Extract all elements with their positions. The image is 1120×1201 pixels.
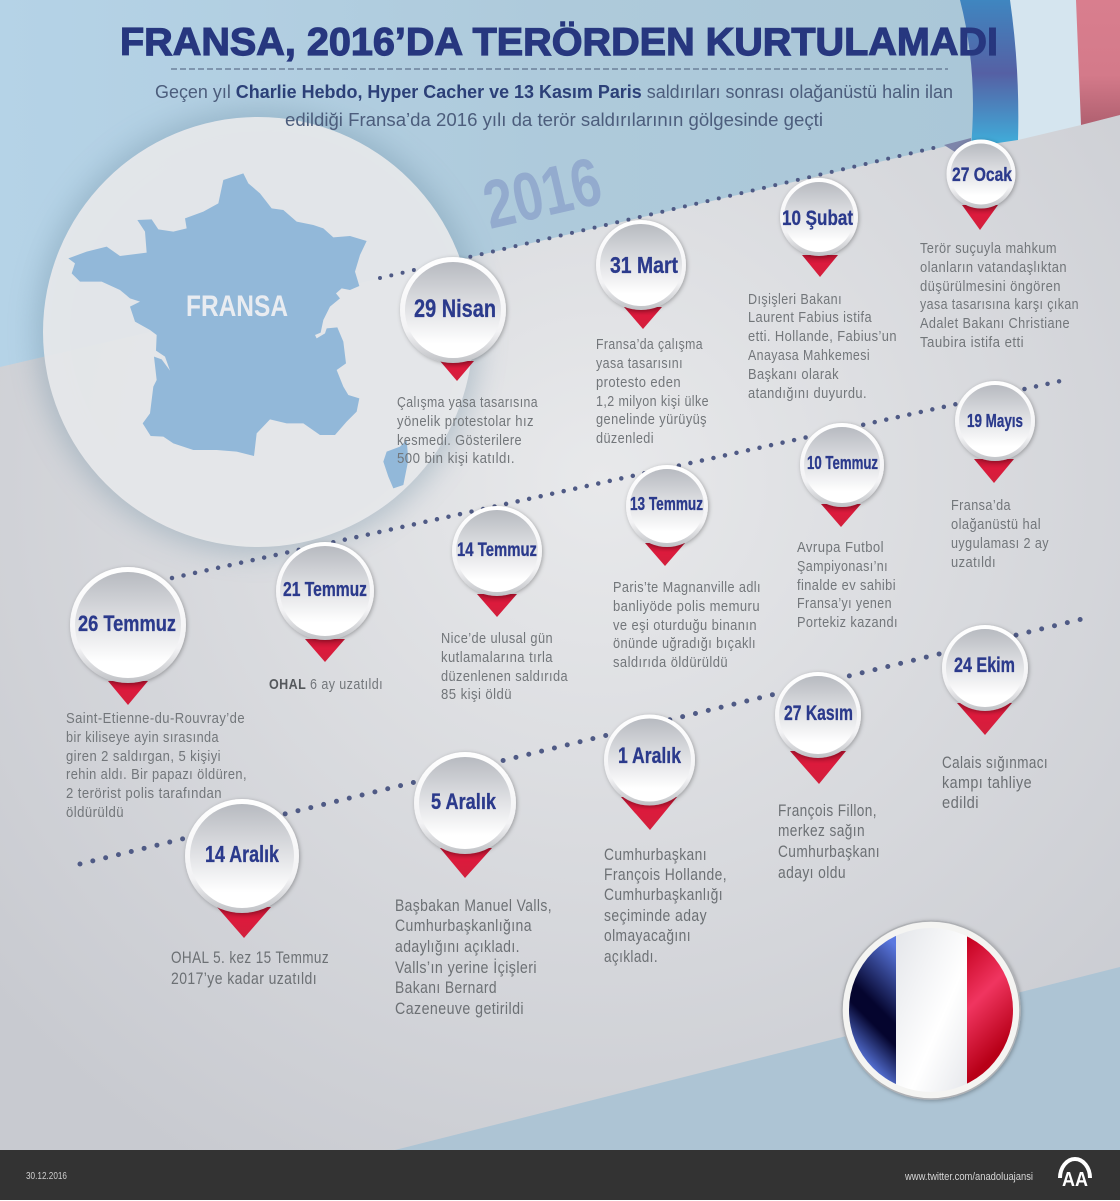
text: 14 Aralık bbox=[171, 948, 329, 988]
pin: 31 Mart bbox=[596, 220, 686, 329]
text: 26 Temmuz: giren 2 saldırgan, 5 kişiyi bbox=[66, 748, 221, 765]
text: 27 Kasım: merkez sağın bbox=[778, 821, 865, 840]
text: 19 Mayıs: olağanüstü hal bbox=[951, 516, 1041, 533]
text: 10 Temmuz: Fransa’yı yenen bbox=[797, 595, 892, 612]
text: 31 Mart: genelinde yürüyüş bbox=[596, 411, 707, 428]
pin: 26 Temmuz bbox=[70, 567, 186, 705]
text: 14 Temmuz: Nice’de ulusal gün bbox=[441, 630, 553, 647]
text: 10 Şubat: Laurent Fabius istifa bbox=[748, 309, 872, 326]
pin: 27 Ocak: 27 Ocak bbox=[952, 165, 1012, 186]
text: 14 Temmuz bbox=[441, 630, 568, 703]
logo: AA: AA bbox=[1062, 1169, 1088, 1191]
text: 27 Ocak: olanların vatandaşlıktan bbox=[920, 259, 1067, 276]
pin: 21 Temmuz: 21 Temmuz bbox=[283, 579, 367, 601]
text: 31 Mart: protesto eden bbox=[596, 374, 681, 391]
text: 24 Ekim: Calais sığınmacı bbox=[942, 753, 1048, 772]
text: 10 Şubat: Anayasa Mahkemesi bbox=[748, 347, 870, 364]
text: 27 Kasım bbox=[778, 801, 880, 882]
pin: 13 Temmuz: 13 Temmuz bbox=[630, 494, 703, 514]
text: 29 Nisan: yönelik protestolar hız bbox=[397, 413, 534, 430]
pin: 29 Nisan bbox=[400, 257, 506, 381]
logo: AA bbox=[1060, 1159, 1090, 1191]
text: 24 Ekim bbox=[942, 753, 1048, 812]
text: 5 Aralık: Cumhurbaşkanlığına bbox=[395, 916, 532, 935]
text: 1 Aralık: Cumhurbaşkanı bbox=[604, 845, 707, 864]
text: 29 Nisan bbox=[397, 394, 538, 467]
text: 5 Aralık bbox=[395, 896, 552, 1018]
text: 10 Şubat: Dışişleri Bakanı bbox=[748, 291, 842, 308]
text: 31 Mart: yasa tasarısını bbox=[596, 355, 683, 372]
text: 14 Temmuz: kutlamalarına tırla bbox=[441, 649, 553, 666]
subtitle: Geçen yıl Charlie Hebdo, Hyper Cacher ve 13 Kasım Paris saldırıları sonrası olağanüstü halin ilan bbox=[155, 81, 953, 102]
icon: French flag badge bbox=[842, 921, 1020, 1099]
text: 19 Mayıs: uzatıldı bbox=[951, 554, 996, 571]
pin: 10 Şubat: 10 Şubat bbox=[782, 207, 853, 230]
text: 27 Kasım: François Fillon, bbox=[778, 801, 877, 820]
text: 5 Aralık: Cazeneuve getirildi bbox=[395, 999, 524, 1018]
text: 31 Mart bbox=[596, 336, 709, 447]
text: 27 Ocak: Adalet Bakanı Christiane bbox=[920, 315, 1070, 332]
text: 14 Temmuz: 85 kişi öldü bbox=[441, 686, 512, 703]
text: 27 Ocak: Taubira istifa etti bbox=[920, 334, 1024, 351]
text: 19 Mayıs: Fransa’da bbox=[951, 497, 1011, 514]
text: 26 Temmuz: bir kiliseye ayin sırasında bbox=[66, 729, 219, 746]
text: 10 Temmuz: finalde ev sahibi bbox=[797, 577, 896, 594]
text: 31 Mart: Fransa’da çalışma bbox=[596, 336, 703, 353]
globe bbox=[36, 110, 480, 554]
pin: 14 Temmuz: 14 Temmuz bbox=[457, 540, 537, 561]
text: 1 Aralık: açıkladı. bbox=[604, 947, 658, 966]
text: 27 Ocak: düşürülmesini öngören bbox=[920, 278, 1061, 295]
text: 19 Mayıs: uygulaması 2 ay bbox=[951, 535, 1049, 552]
pin: 13 Temmuz bbox=[626, 465, 708, 566]
text: 13 Temmuz bbox=[613, 579, 761, 671]
pin: 14 Aralık bbox=[185, 799, 299, 938]
map of France bbox=[68, 173, 408, 488]
pin: 14 Temmuz bbox=[452, 506, 542, 617]
title: FRANSA, 2016’DA TERÖRDEN KURTULAMADI bbox=[120, 21, 998, 64]
text: 26 Temmuz: Saint-Etienne-du-Rouvray’de bbox=[66, 710, 245, 727]
pin: 5 Aralık bbox=[414, 752, 516, 878]
text: 1 Aralık: François Hollande, bbox=[604, 865, 727, 884]
text: 5 Aralık: Valls’ın yerine İçişleri bbox=[395, 958, 537, 977]
text: 1 Aralık: seçiminde aday bbox=[604, 906, 707, 925]
text: 27 Kasım: adayı oldu bbox=[778, 863, 846, 882]
text: 27 Ocak: Terör suçuyla mahkum bbox=[920, 240, 1057, 257]
pin: 10 Temmuz: 10 Temmuz bbox=[807, 453, 878, 473]
date: 30.12.2016 bbox=[26, 1170, 67, 1182]
text: 1 Aralık: olmayacağını bbox=[604, 926, 691, 945]
text: 24 Ekim: edildi bbox=[942, 793, 979, 812]
year 2016: 2016 bbox=[476, 143, 608, 244]
text: 1 Aralık: Cumhurbaşkanlığı bbox=[604, 885, 723, 904]
text: 13 Temmuz: saldırıda öldürüldü bbox=[613, 654, 728, 671]
pin: 24 Ekim: 24 Ekim bbox=[954, 654, 1015, 677]
text: 26 Temmuz: 2 terörist polis tarafından bbox=[66, 785, 222, 802]
pin: 10 Temmuz bbox=[800, 423, 884, 527]
text: 21 Temmuz: OHAL 6 ay uzatıldı bbox=[269, 676, 383, 693]
text: 10 Temmuz: Portekiz kazandı bbox=[797, 614, 898, 631]
text: 5 Aralık: Başbakan Manuel Valls, bbox=[395, 896, 552, 915]
text: 13 Temmuz: Paris’te Magnanville adlı bbox=[613, 579, 761, 596]
text: 5 Aralık: Bakanı Bernard bbox=[395, 978, 497, 997]
pin: 29 Nisan: 29 Nisan bbox=[414, 295, 496, 323]
pin: 27 Ocak bbox=[946, 140, 1016, 230]
text: 24 Ekim: kampı tahliye bbox=[942, 773, 1032, 792]
text: 14 Temmuz: düzenlenen saldırıda bbox=[441, 668, 568, 685]
text: 26 Temmuz bbox=[66, 710, 247, 821]
pin: 24 Ekim bbox=[942, 625, 1028, 735]
text: 27 Kasım: Cumhurbaşkanı bbox=[778, 842, 880, 861]
pin: 31 Mart: 31 Mart bbox=[610, 252, 678, 278]
pin: 27 Kasım: 27 Kasım bbox=[784, 702, 853, 725]
text: 10 Temmuz: Şampiyonası’nı bbox=[797, 558, 888, 575]
text: 26 Temmuz: rehin aldı. Bir papazı öldüren, bbox=[66, 766, 247, 783]
ribbon: French colours bbox=[944, 0, 1120, 152]
map label: FRANSA bbox=[186, 290, 288, 323]
pin: 21 Temmuz bbox=[276, 542, 374, 662]
subtitle: edildiği Fransa’da 2016 yılı da terör saldırılarının gölgesinde geçti bbox=[285, 109, 823, 130]
subtitle bbox=[155, 81, 953, 130]
dotted timeline 1 bbox=[380, 146, 942, 278]
dotted timeline 3 bbox=[80, 619, 1082, 864]
text: 10 Şubat: atandığını duyurdu. bbox=[748, 385, 867, 402]
pin: 27 Kasım bbox=[775, 672, 861, 784]
pin: 19 Mayıs bbox=[955, 381, 1035, 483]
pin: 5 Aralık: 5 Aralık bbox=[431, 789, 497, 814]
pin: 1 Aralık: 1 Aralık bbox=[618, 743, 682, 768]
pin: 10 Şubat bbox=[780, 178, 858, 277]
text: 10 Şubat bbox=[748, 291, 897, 402]
pin: 26 Temmuz: 26 Temmuz bbox=[78, 611, 176, 636]
text: 29 Nisan: 500 bin kişi katıldı. bbox=[397, 450, 515, 467]
text: 29 Nisan: kesmedi. Gösterilere bbox=[397, 432, 522, 449]
footer bar bbox=[0, 1150, 1120, 1201]
text: 13 Temmuz: önünde uğradığı bıçaklı bbox=[613, 635, 756, 652]
text: 13 Temmuz: ve eşi oturduğu binanın bbox=[613, 617, 757, 634]
text: 31 Mart: düzenledi bbox=[596, 430, 654, 447]
text: 27 Ocak bbox=[920, 240, 1079, 351]
text: 10 Şubat: etti. Hollande, Fabius’un bbox=[748, 328, 897, 345]
pin: 14 Aralık: 14 Aralık bbox=[205, 841, 279, 867]
text: 1 Aralık bbox=[604, 845, 727, 966]
text: 10 Şubat: Başkanı olarak bbox=[748, 366, 839, 383]
text: 31 Mart: 1,2 milyon kişi ülke bbox=[596, 393, 709, 410]
text: 19 Mayıs bbox=[951, 497, 1049, 571]
text: 10 Temmuz: Avrupa Futbol bbox=[797, 539, 884, 556]
text: 14 Aralık: OHAL 5. kez 15 Temmuz bbox=[171, 948, 329, 967]
dashed divider bbox=[171, 68, 948, 70]
text: 14 Aralık: 2017’ye kadar uzatıldı bbox=[171, 969, 317, 988]
dotted timeline 2 bbox=[172, 380, 1065, 578]
url: www.twitter.com/anadoluajansi bbox=[904, 1171, 1033, 1183]
text: 10 Temmuz bbox=[797, 539, 898, 631]
text: 29 Nisan: Çalışma yasa tasarısına bbox=[397, 394, 538, 411]
text: 5 Aralık: adaylığını açıkladı. bbox=[395, 937, 520, 956]
text: 13 Temmuz: banliyöde polis memuru bbox=[613, 598, 760, 615]
text: 26 Temmuz: öldürüldü bbox=[66, 804, 124, 821]
pin: 1 Aralık bbox=[604, 714, 695, 830]
text: 27 Ocak: yasa tasarısına karşı çıkan bbox=[920, 296, 1079, 313]
pin: 19 Mayıs: 19 Mayıs bbox=[967, 411, 1023, 431]
